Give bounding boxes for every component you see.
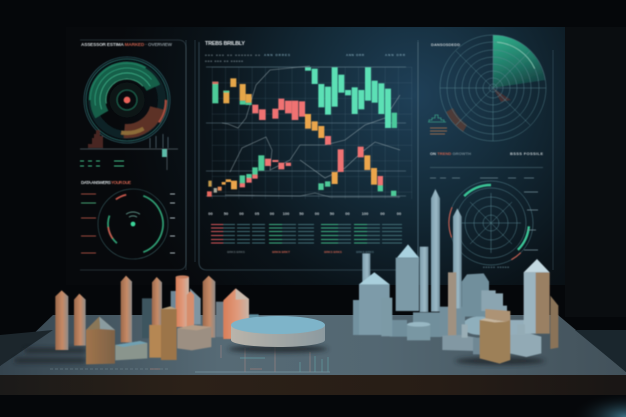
house C: [462, 273, 489, 317]
axis numbers row: 50: [224, 211, 229, 216]
table captions: [227, 250, 374, 254]
second spire: [453, 208, 462, 308]
panel: central chart: [199, 41, 418, 270]
column rear: [362, 253, 370, 282]
stepped block: [481, 290, 507, 311]
tan block foreground: [480, 309, 510, 364]
candles: teal series: [305, 67, 397, 128]
house A: [359, 272, 390, 335]
city: blue buildings: [353, 189, 558, 364]
table top: [0, 315, 626, 375]
table reflected chart: [50, 345, 330, 372]
chart sub labels: ANN ORR: [346, 53, 365, 57]
central disc: [231, 316, 325, 347]
axis numbers row: [208, 211, 402, 216]
small green stats: [80, 161, 124, 166]
table captions: BRKN BRKT: [272, 250, 290, 254]
stepped blocks: [149, 306, 177, 360]
chart sub labels: ANN ORRES: [264, 53, 290, 57]
table captions: BRKS BRKS: [324, 250, 342, 254]
compass caption: ooooo ooooo: [483, 265, 509, 269]
tall spire: [431, 189, 440, 312]
house left: [86, 317, 115, 364]
table captions: BRKS BRKS: [356, 250, 374, 254]
tan column: [448, 272, 456, 336]
central panel frame: [199, 42, 418, 270]
house D: [524, 259, 550, 334]
axis numbers row: 00: [315, 211, 320, 216]
chart grid: [206, 67, 412, 199]
candlesticks: [207, 67, 397, 197]
candles: upper left: [212, 78, 331, 145]
axis numbers row: 100: [362, 211, 369, 216]
chart sub labels: ANN ORR: [385, 53, 406, 57]
panel: left gauges: [80, 40, 186, 270]
spire 1: [55, 290, 68, 350]
low block: [115, 341, 147, 360]
chart sub labels: ooo ooo oo ooooo: [205, 59, 243, 63]
spire 3: [121, 276, 132, 342]
left panel frame: [80, 40, 186, 270]
data rows table: [211, 224, 402, 243]
chart: ring gauge: [91, 182, 175, 266]
spire 5: [203, 276, 215, 338]
axis numbers row: 00: [397, 211, 402, 216]
left panel title: ASSESSOR ESTIMA MARKED · OVERVIEW: [81, 42, 173, 47]
axis numbers row: 50: [299, 211, 304, 216]
axis numbers row: 00: [239, 211, 244, 216]
column B: [420, 247, 428, 312]
axis numbers row: 100: [283, 211, 290, 216]
bottom shade: [0, 395, 570, 417]
spire 4: [152, 277, 162, 326]
table shadows: [15, 345, 545, 365]
candles: lower series: [207, 147, 396, 197]
base blocks: [353, 300, 530, 337]
second gauge title: DATA ANSWERS YOUR DUE: [81, 180, 131, 185]
axis and highlighted bar: [80, 149, 178, 170]
table captions: BRKS BRKS: [227, 250, 245, 254]
axis numbers row: 00: [270, 211, 275, 216]
chart: compass radar: [432, 164, 550, 282]
radar title: DANSOSDEDD: [431, 42, 460, 47]
spire 2: [74, 294, 86, 346]
foreground blocks: [381, 298, 541, 357]
orange house: [223, 288, 249, 339]
right headings: [430, 151, 543, 156]
axis numbers row: 05: [255, 211, 260, 216]
chart: radial gauge green and orange: [82, 55, 172, 145]
slim tan slab: [550, 296, 558, 349]
rear blocks: [142, 288, 259, 338]
gauge side labels: [81, 194, 96, 253]
table front edge: [0, 375, 626, 395]
right headings: BSSS FOSSILE: [510, 151, 543, 156]
compass side labels: [524, 192, 538, 250]
rear disc: [462, 316, 497, 335]
mini bar chart: [88, 130, 103, 148]
floor glow: [570, 392, 626, 417]
radar note: [430, 128, 447, 134]
wide plinth: [177, 325, 211, 350]
axis numbers row: 00: [380, 211, 385, 216]
dashboard screen: [66, 27, 626, 317]
right headings: ON TREND GROWTH: [430, 151, 471, 156]
trend lines: [222, 66, 400, 197]
chart sub labels: [205, 53, 406, 63]
chart sub labels: ooo ooo oo oooooo oo: [205, 53, 260, 57]
axis numbers row: 00: [345, 211, 350, 216]
chart: radar with green wedge: [440, 35, 546, 141]
axis numbers row: 00: [208, 211, 213, 216]
city: orange buildings: [55, 275, 259, 364]
cylinder tower: [176, 275, 194, 327]
chart title: TREBS BRILBLY: [205, 41, 245, 47]
radar mini chart: [428, 115, 446, 122]
axis numbers row: 50: [330, 211, 335, 216]
panel: right radars: [428, 35, 550, 282]
house B: [396, 244, 419, 311]
